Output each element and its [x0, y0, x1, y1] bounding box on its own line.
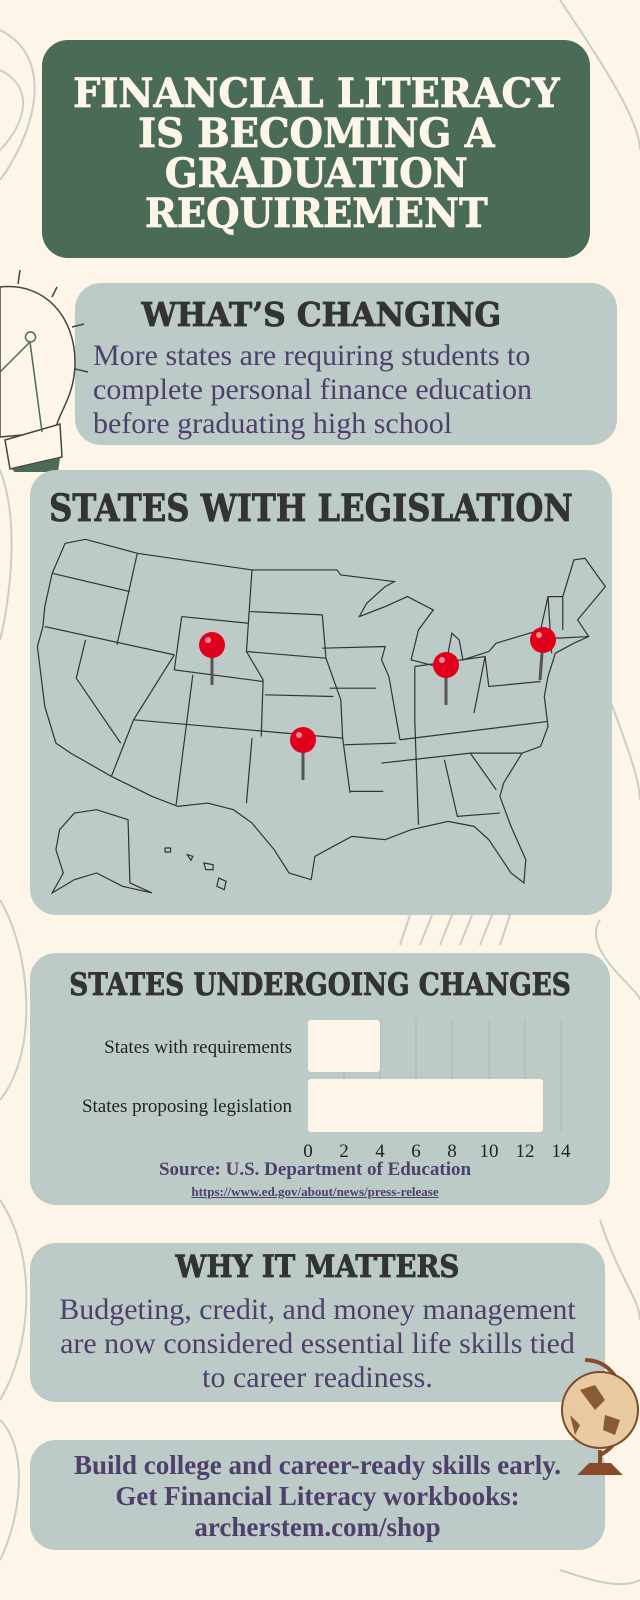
panel: states undergoing changes — [30, 953, 610, 1205]
title text: GRADUATION — [165, 150, 467, 197]
bar chart: 6 — [411, 1141, 421, 1162]
text: call to action: archerstem.com/shop — [194, 1512, 441, 1542]
heading: why it matters: WHY IT MATTERS — [176, 1249, 459, 1285]
bar chart: 4 — [375, 1141, 385, 1162]
text: what's changing: complete personal finance education — [93, 373, 532, 406]
source url: https://www.ed.gov/about/news/press-release — [191, 1184, 439, 1199]
panel: what's changing — [75, 283, 617, 445]
text: why it matters: are now considered essential life skills tied — [60, 1327, 575, 1360]
bar chart: States with requirements — [104, 1037, 292, 1058]
title text — [73, 70, 560, 237]
bar chart: 2 — [339, 1141, 349, 1162]
text: why it matters — [59, 1293, 576, 1394]
heading: states with legislation: STATES WITH LEGISLATION — [49, 486, 573, 530]
panel: call to action — [30, 1440, 605, 1550]
panel: why it matters — [30, 1243, 605, 1402]
bar chart: 10 — [480, 1141, 498, 1162]
text: what's changing — [93, 339, 532, 440]
title banner — [42, 40, 590, 258]
source text: Source: U.S. Department of Education — [159, 1159, 471, 1180]
bar chart: 14 — [552, 1141, 571, 1162]
map: US states — [36, 538, 606, 894]
title text: IS BECOMING A — [138, 110, 494, 157]
text: why it matters: to career readiness. — [202, 1361, 433, 1394]
icon: light bulb — [0, 270, 88, 472]
heading: what's changing: WHAT’S CHANGING — [141, 295, 501, 334]
bar chart — [82, 1020, 571, 1162]
text: call to action: Get Financial Literacy workbooks: — [115, 1481, 520, 1511]
bar chart: 0 — [303, 1141, 313, 1162]
pins — [199, 627, 556, 780]
title text: REQUIREMENT — [145, 190, 487, 237]
title text: FINANCIAL LITERACY — [73, 70, 559, 117]
text: what's changing: More states are requiring students to — [93, 339, 530, 372]
text: call to action — [74, 1450, 561, 1542]
icon: globe — [561, 1358, 639, 1475]
text: call to action: Build college and career-ready skills early. — [74, 1450, 561, 1480]
text: why it matters: Budgeting, credit, and money management — [59, 1293, 576, 1326]
bar chart: 8 — [447, 1141, 457, 1162]
bar chart: 12 — [516, 1141, 534, 1162]
bar chart: States proposing legislation — [82, 1096, 292, 1117]
panel: states with legislation — [30, 470, 612, 915]
text: what's changing: before graduating high school — [93, 407, 452, 440]
heading: states undergoing changes: STATES UNDERGOING CHANGES — [69, 967, 571, 1003]
